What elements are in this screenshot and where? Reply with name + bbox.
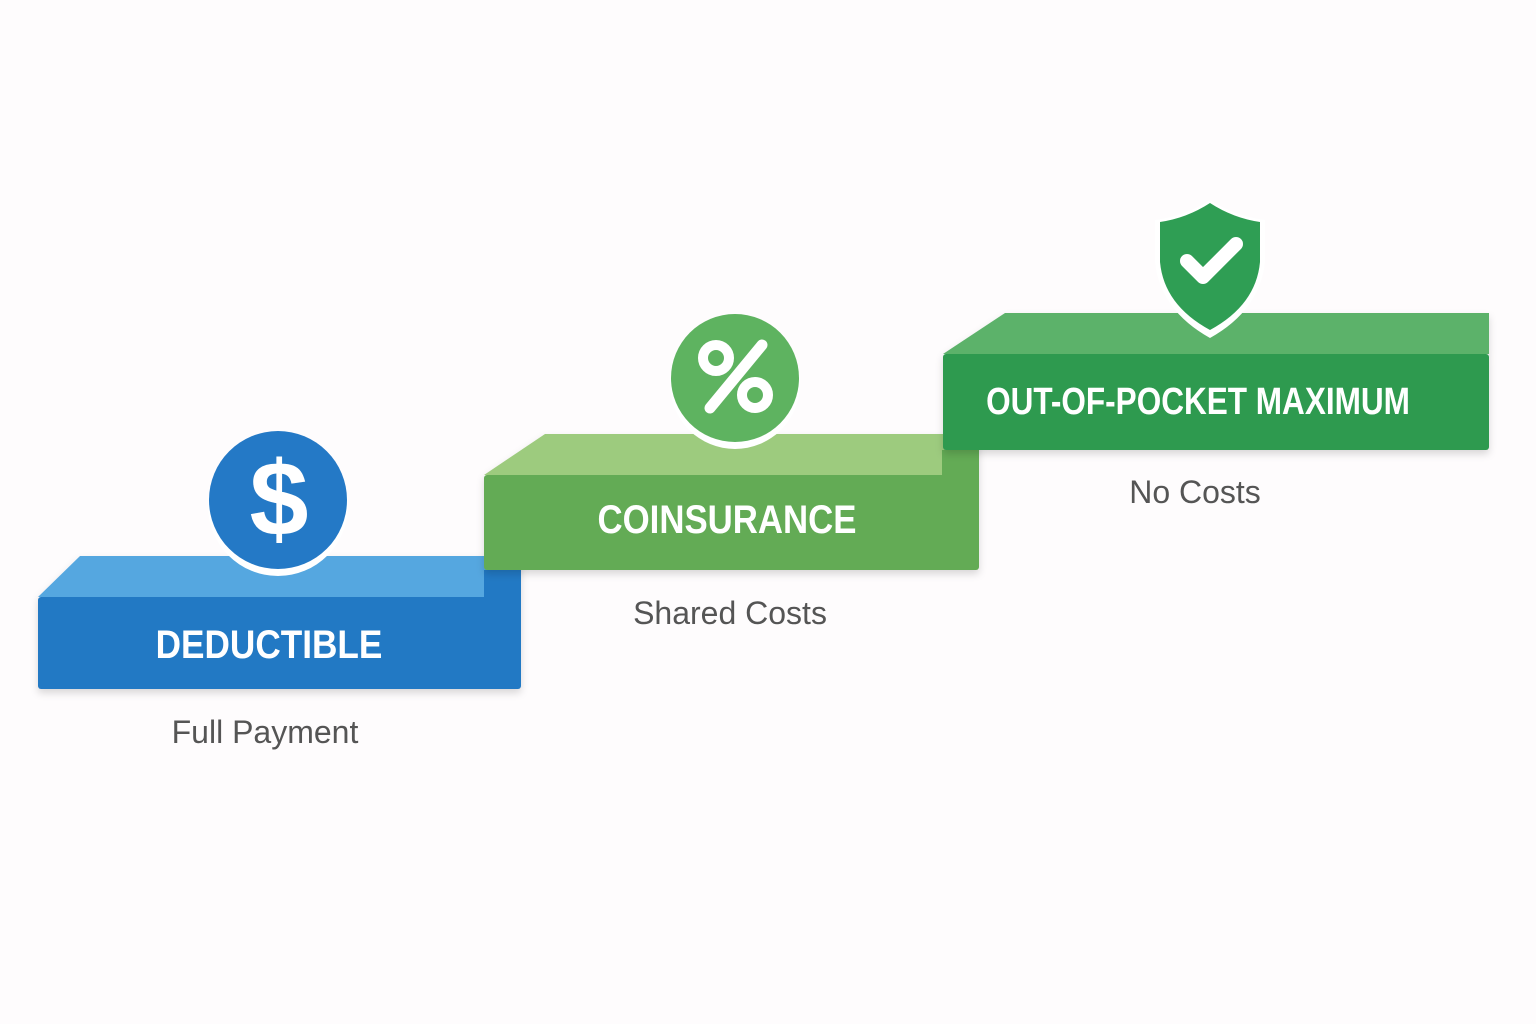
label: OUT-OF-POCKET MAXIMUM: OUT-OF-POCKET MAXIMUM (986, 380, 1410, 423)
caption: Shared Costs: Shared Costs (633, 595, 827, 631)
label: DEDUCTIBLE: DEDUCTIBLE (156, 622, 382, 666)
step: out-of-pocket maximum (943, 200, 1489, 510)
caption: Full Payment: Full Payment (172, 714, 358, 750)
icon: dollar coin (208, 431, 348, 576)
icon: dollar coin: $ (250, 440, 308, 558)
step: deductible (38, 431, 521, 750)
icon: shield check (1155, 200, 1265, 338)
caption: No Costs: No Costs (1129, 474, 1261, 510)
block: coinsurance (484, 434, 979, 570)
label: COINSURANCE: COINSURANCE (597, 497, 857, 542)
step: coinsurance (484, 314, 979, 631)
block: deductible (38, 556, 521, 689)
block: out-of-pocket (943, 313, 1489, 450)
icon: percent circle (670, 314, 800, 449)
